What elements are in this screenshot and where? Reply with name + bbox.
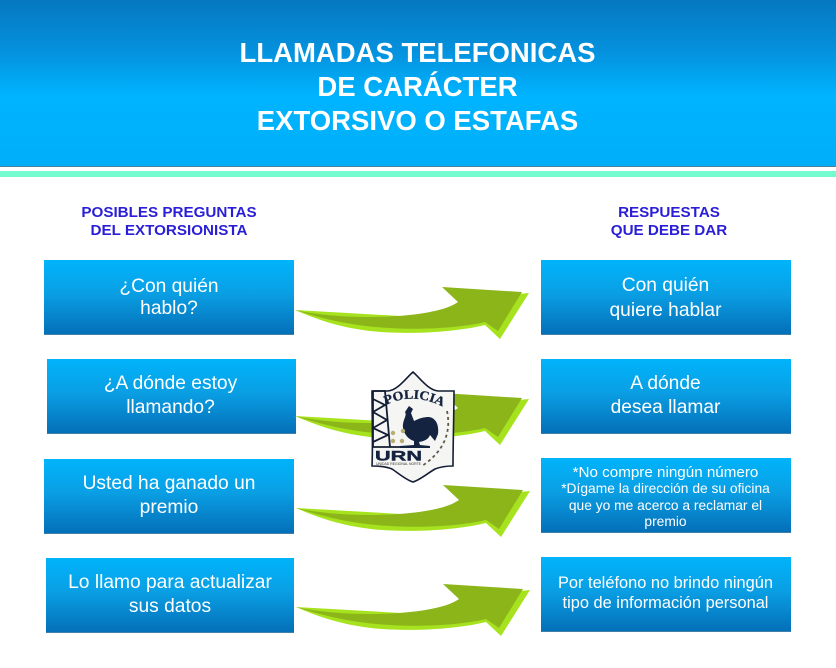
answer box 2 bbox=[541, 359, 791, 434]
answer box 2: desea llamar bbox=[611, 397, 720, 418]
question box 4: Lo llamo para actualizar bbox=[68, 572, 272, 593]
header banner bbox=[0, 0, 836, 167]
arrow 1 bbox=[295, 287, 529, 339]
question box 3: premio bbox=[140, 497, 198, 518]
question box 1 bbox=[44, 260, 294, 335]
heading: answers: QUE DEBE DAR bbox=[611, 222, 727, 239]
heading: questions: DEL EXTORSIONISTA bbox=[91, 222, 247, 239]
question box 1: ¿Con quién bbox=[119, 276, 219, 297]
icon: police badge bbox=[371, 371, 455, 483]
answer box 4: tipo de información personal bbox=[563, 594, 768, 612]
answer box 3: que yo me acerco a reclamar el bbox=[569, 498, 762, 512]
title: LLAMADAS TELEFONICAS bbox=[240, 37, 595, 68]
badge rooster bbox=[400, 406, 438, 448]
arrow 2 bbox=[295, 393, 529, 445]
heading: answers: RESPUESTAS bbox=[618, 204, 720, 221]
answer box 1: Con quién bbox=[622, 275, 709, 296]
arrow 3 bbox=[296, 485, 530, 537]
answer box 3: *Dígame la dirección de su oficina bbox=[561, 481, 770, 496]
question box 2: ¿A dónde estoy bbox=[104, 372, 237, 394]
question box 4 bbox=[46, 558, 294, 633]
badge branch bbox=[422, 411, 448, 466]
answer box 3 bbox=[541, 458, 791, 533]
heading: questions bbox=[81, 204, 257, 239]
badge tower bbox=[373, 391, 430, 447]
question box 2: llamando? bbox=[126, 396, 215, 418]
question box 3: Usted ha ganado un bbox=[83, 473, 255, 494]
answer box 1: quiere hablar bbox=[609, 300, 722, 321]
title: EXTORSIVO O ESTAFAS bbox=[257, 105, 578, 136]
answer box 3: premio bbox=[644, 514, 687, 529]
badge word POLICIA: POLICIA bbox=[382, 390, 443, 407]
title: DE CARÁCTER bbox=[317, 71, 518, 102]
question box 4: sus datos bbox=[129, 596, 211, 617]
answer box 4: Por teléfono no brindo ningún bbox=[558, 574, 773, 592]
title bbox=[240, 37, 595, 136]
arrow 4 bbox=[296, 584, 530, 636]
answer box 2: A dónde bbox=[630, 373, 701, 394]
badge stars bbox=[391, 429, 405, 443]
badge caption: UNIDAD REGIONAL NORTE bbox=[376, 462, 422, 466]
mint divider band bbox=[0, 171, 836, 177]
question box 2 bbox=[47, 359, 296, 434]
answer box 4 bbox=[541, 557, 791, 632]
answer box 3: *No compre ningún número bbox=[573, 464, 758, 481]
answer box 1 bbox=[541, 260, 791, 335]
heading: questions: POSIBLES PREGUNTAS bbox=[81, 204, 257, 221]
heading: answers bbox=[611, 204, 727, 239]
question box 3 bbox=[44, 459, 294, 534]
question box 1: hablo? bbox=[140, 298, 198, 319]
badge letters URN: URN bbox=[375, 448, 422, 464]
